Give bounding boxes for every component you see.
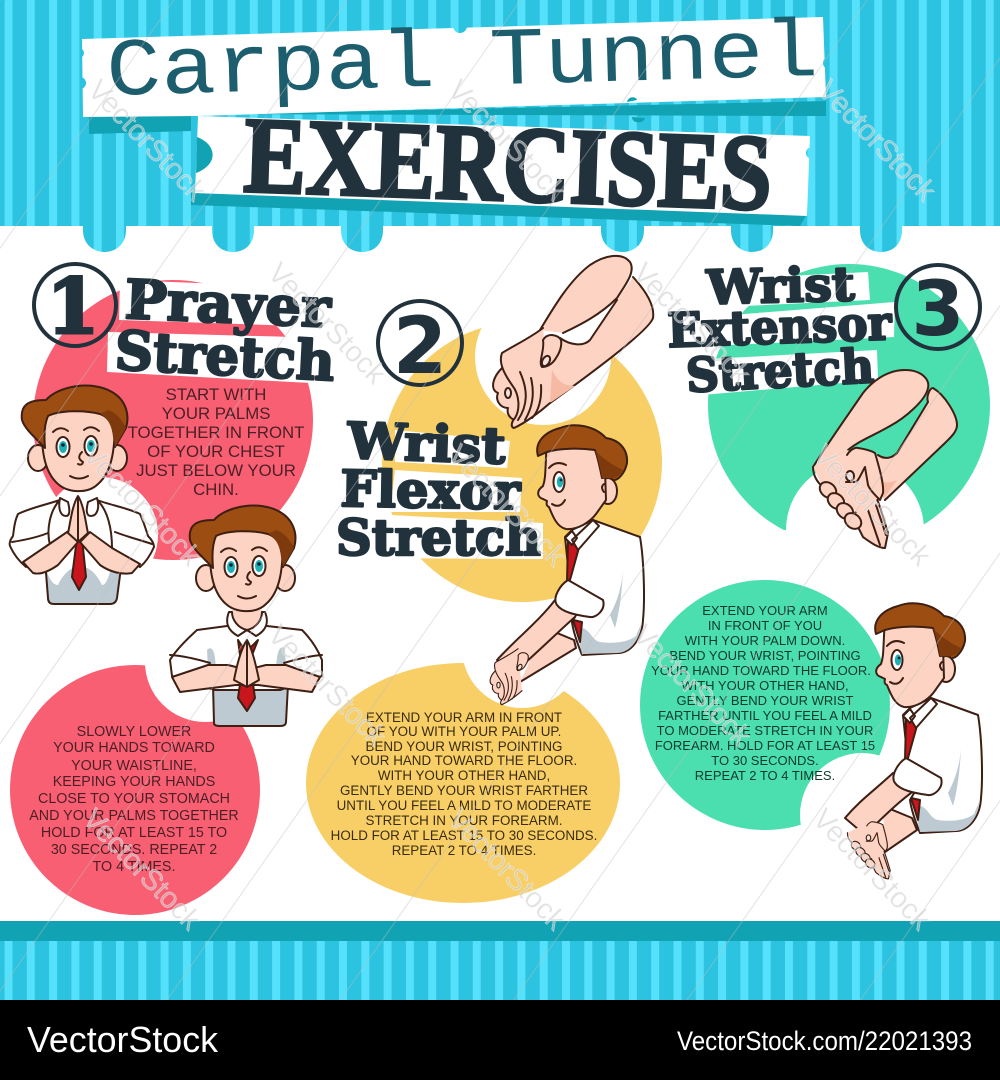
panel: red blob top — [33, 280, 313, 560]
text block: wrist flexor instructions: WITH YOUR OTHER HAND, — [378, 768, 550, 783]
text block: wrist flexor instructions: UNTIL YOU FEEL A MILD TO MODERATE — [337, 798, 591, 813]
watermarks: VectorStock — [806, 803, 937, 937]
heading: Wrist Flexor Stretch: Stretch — [336, 508, 541, 567]
text block: prayer stretch step 2: KEEPING YOUR HANDS — [53, 774, 215, 790]
text block: prayer stretch step 1 — [128, 385, 304, 499]
heading 3: number: 3 — [912, 264, 964, 353]
heading: Wrist Extensor Stretch — [666, 257, 895, 404]
text block: wrist extensor instructions: REPEAT 2 TO 4 TIMES. — [695, 768, 835, 783]
watermarks: VectorStock — [626, 619, 757, 753]
text block: wrist flexor instructions: YOUR HAND TOWARD THE FLOOR. — [351, 753, 577, 768]
text block: prayer stretch step 2: CLOSE TO YOUR STOMACH — [38, 791, 230, 807]
watermarks: VectorStock — [261, 257, 392, 391]
text block: prayer stretch step 1: YOUR PALMS — [162, 404, 270, 423]
footer logo text: VectorStock — [27, 1019, 219, 1060]
text block: prayer stretch step 2: AND YOUR PALMS TOGETHER — [29, 808, 239, 824]
text block: prayer stretch step 2: YOUR HANDS TOWARD — [53, 740, 215, 756]
top striped band — [0, 0, 1000, 252]
figure: wrist extensor hands close-up — [813, 370, 957, 548]
watermarks: VectorStock — [76, 439, 207, 573]
heading: Wrist Flexor Stretch — [336, 411, 543, 567]
text block: prayer stretch step 2: 30 SECONDS. REPEAT 2 — [51, 842, 217, 858]
panel: red bottom notch — [145, 602, 265, 722]
watermarks: VectorStock — [811, 74, 942, 208]
text block: wrist extensor instructions: GENTLY BEND YOUR WRIST — [677, 693, 854, 708]
heading: Wrist Extensor Stretch: Wrist — [705, 257, 856, 316]
heading: Wrist Extensor Stretch: Stretch — [685, 339, 875, 404]
panel: red blob bottom — [10, 665, 260, 915]
watermarks: VectorStock — [76, 803, 207, 937]
text block: prayer stretch step 2: YOUR WAISTLINE, — [71, 758, 197, 774]
watermarks: VectorStock — [441, 803, 572, 937]
text block: wrist flexor instructions — [331, 710, 597, 858]
figure: man side view, wrist flexor — [490, 425, 644, 705]
figure: man praying, hands lowered — [170, 506, 322, 726]
text block: wrist extensor instructions: TO 30 SECONDS. — [711, 753, 819, 768]
text block: prayer stretch step 1: OF YOUR CHEST — [147, 442, 285, 461]
heading 2: number — [378, 301, 462, 392]
text block: prayer stretch step 2: HOLD FOR AT LEAST 15 TO — [41, 825, 227, 841]
figure: man praying, hands high — [10, 386, 154, 604]
heading: Prayer Stretch: Stretch — [113, 318, 336, 393]
panel: green blob top — [708, 264, 990, 546]
heading: Wrist Extensor Stretch: Extensor — [666, 296, 893, 359]
watermarks: VectorStock — [441, 74, 572, 208]
text block: prayer stretch step 1: JUST BELOW YOUR — [136, 461, 296, 480]
panel: green bottom notch — [800, 753, 924, 877]
text block: prayer stretch step 1: START WITH — [166, 385, 266, 404]
panel: yellow blob bottom — [306, 663, 620, 903]
text block: wrist extensor instructions: IN FRONT OF YOU — [708, 618, 822, 633]
panel: green blob bottom — [640, 580, 890, 830]
title banners — [74, 7, 835, 233]
text block: prayer stretch step 1: TOGETHER IN FRONT — [128, 423, 304, 442]
text block: wrist extensor instructions — [651, 603, 875, 783]
text block: wrist flexor instructions: HOLD FOR AT LEAST 15 TO 30 SECONDS. — [331, 828, 597, 843]
text block: wrist flexor instructions: STRETCH IN YOUR FOREARM. — [366, 813, 562, 828]
panel: yellow notch — [475, 289, 611, 425]
panel: yellow bottom notch — [462, 588, 582, 708]
heading 3: number — [896, 264, 980, 353]
watermarks: VectorStock — [261, 619, 392, 753]
text block: prayer stretch step 2: SLOWLY LOWER — [77, 724, 191, 740]
heading 1: number: 1 — [47, 262, 99, 351]
text block: wrist flexor instructions: BEND YOUR WRIST, POINTING — [366, 739, 562, 754]
text block: wrist flexor instructions: OF YOU WITH YOUR PALM UP. — [367, 724, 561, 739]
bottom band — [0, 921, 1000, 1000]
footer bar — [0, 1000, 1000, 1080]
text block: wrist extensor instructions: BEND YOUR WRIST, POINTING — [669, 648, 861, 663]
panel: yellow blob top — [382, 322, 662, 602]
text block: wrist extensor instructions: WITH YOUR PALM DOWN. — [685, 633, 845, 648]
title: EXERCISES: EXERCISES — [242, 96, 774, 233]
text block: wrist extensor instructions: FARTHER UNTIL YOU FEEL A MILD — [658, 708, 872, 723]
heading: Wrist Flexor Stretch: Flexor — [340, 459, 521, 521]
heading 1: number — [34, 262, 116, 351]
text block: wrist extensor instructions: YOUR HAND TOWARD THE FLOOR. — [651, 663, 871, 678]
heading: Wrist Flexor Stretch: Wrist — [346, 411, 507, 476]
heading: Prayer Stretch — [107, 267, 336, 393]
watermarks: VectorStock — [806, 439, 937, 573]
watermarks — [76, 74, 942, 937]
panel: green notch — [786, 461, 924, 599]
text block: wrist extensor instructions: TO MODERATE STRETCH IN YOUR — [657, 723, 873, 738]
text block: wrist flexor instructions: EXTEND YOUR ARM IN FRONT — [366, 710, 562, 725]
text block: wrist flexor instructions: GENTLY BEND YOUR WRIST FARTHER — [340, 783, 588, 798]
watermarks: VectorStock — [626, 257, 757, 391]
text block: prayer stretch step 2 — [29, 724, 239, 875]
heading: Prayer Stretch: Prayer — [123, 267, 333, 340]
text block: wrist extensor instructions: EXTEND YOUR ARM — [702, 603, 828, 618]
title: Carpal Tunnel: Carpal Tunnel — [105, 7, 819, 120]
text block: wrist flexor instructions: REPEAT 2 TO 4 TIMES. — [392, 843, 536, 858]
text block: prayer stretch step 1: CHIN. — [193, 480, 239, 499]
text block: prayer stretch step 2: TO 4 TIMES. — [93, 859, 175, 875]
text block: wrist extensor instructions: FOREARM. HOLD FOR AT LEAST 15 — [655, 738, 875, 753]
figure: wrist flexor hands close-up — [493, 256, 653, 428]
panel: red notch — [42, 477, 158, 593]
watermarks: VectorStock — [441, 439, 572, 573]
figure: man side view, wrist extensor — [845, 603, 982, 879]
footer url: VectorStock.com/22021393 — [677, 1026, 972, 1056]
heading 2: number: 2 — [393, 302, 447, 392]
text block: wrist extensor instructions: WITH YOUR OTHER HAND, — [681, 678, 849, 693]
watermarks: VectorStock — [81, 74, 212, 208]
